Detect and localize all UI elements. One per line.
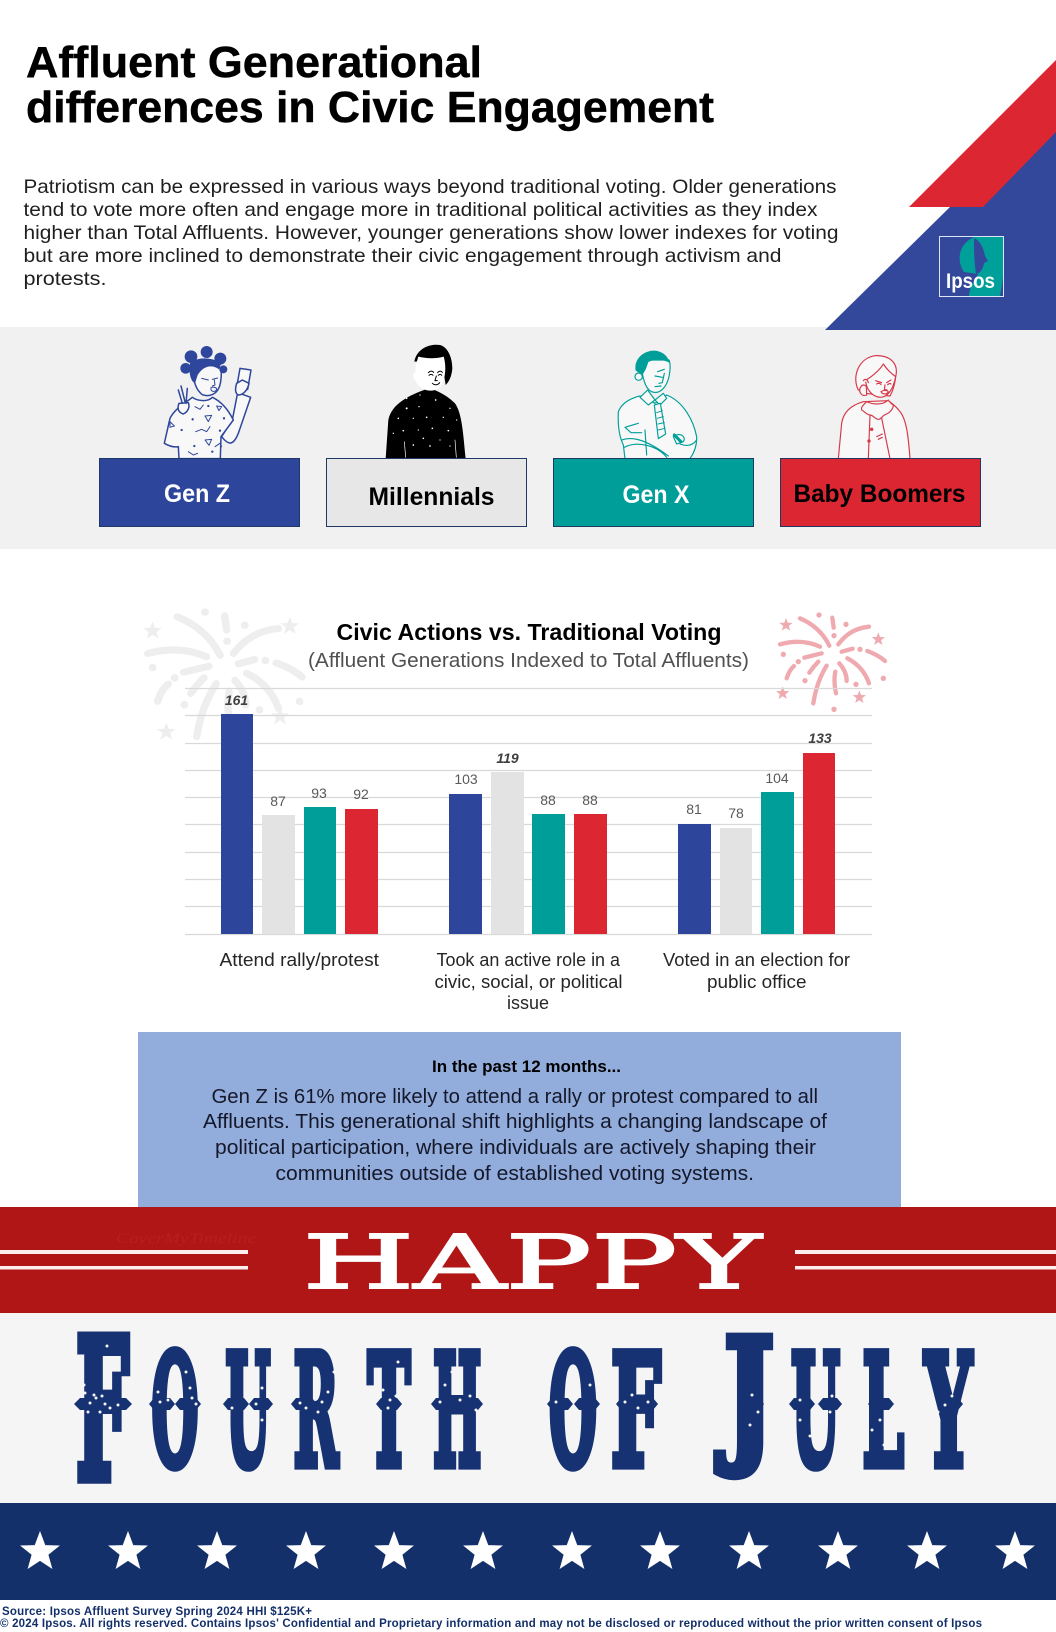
generation card: Gen X: Gen X — [622, 481, 690, 509]
banner: navy stars strip — [0, 1503, 1056, 1600]
title: differences in Civic Engagement — [26, 83, 714, 132]
category labels: civic, social, or political — [434, 971, 622, 992]
illustration: Gen Z person — [164, 346, 251, 459]
category labels: Attend rally/protest — [220, 949, 379, 970]
Fourth of July lettering: F — [611, 1320, 661, 1502]
callout body — [203, 1086, 827, 1185]
callout body: Affluents. This generational shift highlights a changing landscape of — [203, 1111, 827, 1133]
callout body: Gen Z is 61% more likely to attend a rally or protest compared to all — [212, 1086, 818, 1108]
Fourth of July lettering — [76, 1298, 973, 1524]
generations band — [0, 327, 1056, 549]
illustration: Baby Boomer person — [838, 356, 910, 459]
generation card: Millennials: Millennials — [368, 483, 494, 511]
generation card: Millennials — [326, 458, 526, 526]
Fourth of July lettering: H — [433, 1320, 481, 1502]
callout body: communities outside of established voting systems. — [276, 1163, 754, 1185]
generation card: Baby Boomers: Baby Boomers — [794, 480, 966, 508]
distressed texture on lettering — [84, 1346, 952, 1445]
illustration: Millennial person — [386, 345, 466, 459]
footer source notes: Source: Ipsos Affluent Survey Spring 2024 HHI $125K+ — [2, 1606, 312, 1618]
Fourth of July lettering: O — [152, 1320, 198, 1502]
data labels: 133 — [808, 730, 832, 746]
row of white stars — [20, 1531, 1035, 1569]
waist spurs on lettering — [74, 1398, 963, 1410]
icon: pink firework — [776, 612, 886, 712]
banner: white Fourth of July strip — [0, 1313, 1056, 1503]
callout body: political participation, where individuals are actively shaping their — [215, 1137, 816, 1159]
data labels: 78 — [728, 805, 744, 821]
Fourth of July lettering: U — [791, 1320, 840, 1502]
Fourth of July lettering: L — [862, 1320, 904, 1502]
data labels: 81 — [686, 801, 702, 817]
footer source notes: © 2024 Ipsos. All rights reserved. Contains Ipsos' Confidential and Proprietary information and may not be disclosed or reproduced without the prior written consent of Ipsos — [0, 1618, 982, 1630]
banner: red Happy strip — [0, 1207, 1056, 1313]
category labels: public office — [707, 971, 806, 992]
generation card: Gen Z — [100, 458, 300, 526]
intro paragraph: higher than Total Affluents. However, younger generations show lower indexes for voting — [24, 222, 838, 244]
bars: Voted in an election — [678, 753, 835, 934]
generation card: Baby Boomers — [780, 458, 980, 526]
logo: Ipsos: Ipsos — [946, 270, 995, 293]
Fourth of July lettering: Y — [923, 1320, 973, 1502]
footer source notes — [0, 1606, 982, 1630]
category labels: Took an active role in a — [436, 949, 621, 970]
Fourth of July lettering: O — [549, 1320, 597, 1502]
category labels: Voted in an election for — [663, 949, 850, 970]
Fourth of July lettering: R — [294, 1320, 339, 1502]
data labels: 161 — [225, 692, 248, 708]
bars: Took an active role — [449, 772, 607, 934]
title: Affluent Generational — [26, 38, 482, 87]
data labels: 119 — [496, 750, 519, 766]
intro paragraph: tend to vote more often and engage more in traditional political activities as they index — [24, 199, 818, 221]
data labels — [225, 692, 832, 821]
icon: grey firework — [143, 608, 304, 740]
category labels: issue — [507, 992, 549, 1013]
illustration: Gen X person — [618, 351, 697, 459]
callout panel — [138, 1032, 901, 1208]
watermark: CoverMyTimeline — [116, 1231, 256, 1247]
Fourth of July lettering: T — [368, 1320, 410, 1502]
chart subtitle: (Affluent Generations Indexed to Total Affluents) — [308, 650, 749, 672]
blue corner triangle — [825, 101, 1056, 330]
intro paragraph: Patriotism can be expressed in various ways beyond traditional voting. Older generations — [24, 176, 837, 198]
data labels: 104 — [765, 770, 789, 786]
red corner parallelogram — [909, 60, 1056, 207]
category labels — [220, 949, 850, 1013]
title — [26, 38, 714, 132]
data labels: 92 — [353, 786, 369, 802]
data labels: 87 — [270, 793, 286, 809]
Fourth of July lettering: J — [716, 1306, 774, 1480]
data labels: 103 — [454, 771, 478, 787]
bars: Attend rally/protest — [221, 714, 378, 934]
HAPPY lettering: HAPPY — [303, 1220, 763, 1306]
bar chart — [185, 688, 872, 1013]
intro paragraph: protests. — [24, 268, 106, 290]
data labels: 93 — [311, 785, 327, 801]
generation card: Gen X — [554, 458, 754, 526]
intro paragraph: but are more inclined to demonstrate their civic engagement through activism and — [24, 245, 782, 267]
logo: Ipsos — [940, 236, 1004, 296]
Fourth of July lettering: F — [76, 1298, 129, 1524]
data labels: 88 — [582, 792, 598, 808]
chart title: Civic Actions vs. Traditional Voting — [336, 619, 722, 645]
data labels: 88 — [540, 792, 556, 808]
Fourth of July lettering: U — [226, 1320, 270, 1502]
generation card: Gen Z: Gen Z — [164, 480, 230, 508]
intro paragraph — [24, 176, 838, 290]
callout heading: In the past 12 months... — [432, 1057, 621, 1076]
